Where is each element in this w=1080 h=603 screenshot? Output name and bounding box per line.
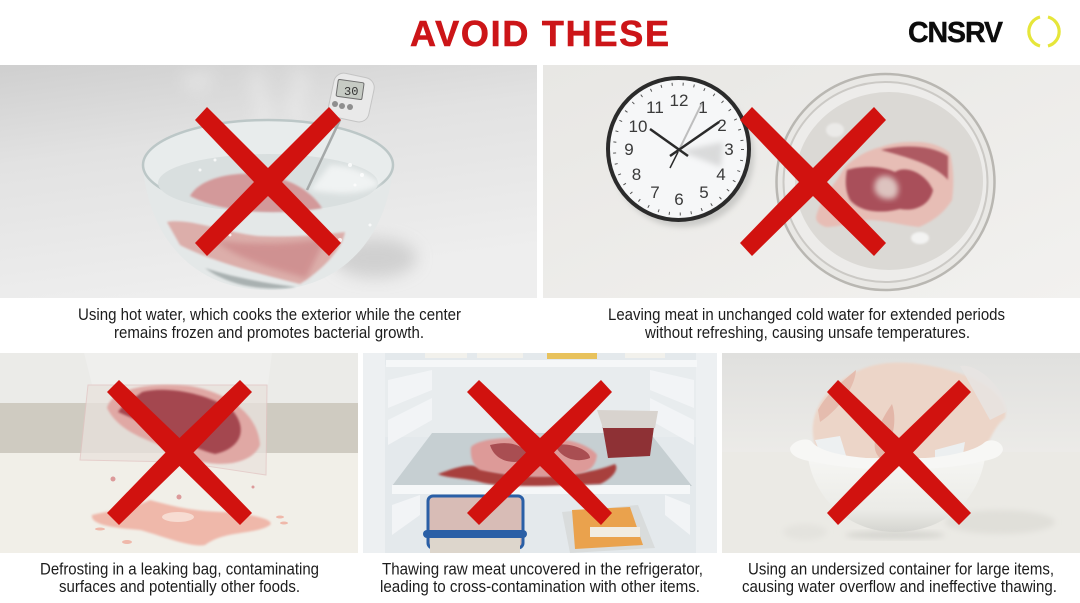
caption: hot water [78, 306, 461, 342]
red cross [740, 107, 886, 256]
clock: 3 [724, 140, 734, 159]
logo: CNSRV [908, 17, 1059, 49]
puddle and drips [92, 476, 288, 545]
bowl shadow [333, 238, 417, 278]
white bowl [790, 440, 1003, 532]
steak [107, 385, 260, 464]
lower steak [167, 221, 345, 284]
steam [189, 70, 301, 130]
clock: 1 [698, 98, 708, 117]
orange container [562, 505, 655, 553]
counter shadow and water [849, 512, 1052, 540]
bubbles [198, 158, 372, 242]
plastic bag [80, 384, 268, 476]
clock [608, 78, 754, 227]
red cross [827, 380, 971, 525]
clock: 5 [699, 183, 709, 202]
title: AVOID THESE [410, 13, 669, 54]
steak [816, 142, 953, 227]
spilled blood [438, 464, 616, 486]
clock: 12 [670, 91, 688, 110]
caption: uncovered in refrigerator [380, 560, 703, 596]
red cross [195, 107, 341, 256]
bowl with steak [776, 74, 994, 290]
glass bowl [143, 120, 393, 290]
caption: unchanged cold water: Leaving meat in unchanged cold water for extended periods [608, 306, 1005, 324]
meat container [597, 410, 658, 458]
caption: uncovered in refrigerator: Thawing raw meat uncovered in the refrigerator, [382, 560, 703, 578]
whole chicken [813, 363, 1006, 465]
raw steak [471, 438, 597, 477]
thermometer [307, 71, 376, 190]
caption: hot water: remains frozen and promotes bacterial growth. [114, 324, 424, 342]
clock: 7 [650, 183, 660, 202]
caption: uncovered in refrigerator: leading to cross-contamination with other items. [380, 578, 700, 596]
clock: 8 [632, 165, 641, 184]
caption: undersized container: causing water overflow and ineffective thawing. [742, 578, 1057, 596]
clock: 6 [674, 190, 684, 209]
red cross [107, 380, 252, 525]
upper steak [190, 174, 322, 212]
caption: hot water: Using hot water, which cooks the exterior while the center [78, 306, 461, 324]
caption: unchanged cold water: without refreshing, causing unsafe temperatures. [644, 324, 970, 342]
caption: unchanged cold water [608, 306, 1005, 342]
panel: unchanged cold water [543, 65, 1080, 298]
side rails [388, 370, 694, 535]
blue container [423, 496, 527, 553]
caption: leaking bag: Defrosting in a leaking bag, contaminating [40, 560, 319, 578]
clock: 11 [646, 98, 664, 117]
clock: 10 [629, 117, 647, 136]
clock: 4 [716, 165, 726, 184]
thermometer: 30 [344, 85, 358, 99]
panel: hot water [0, 65, 537, 298]
panel: leaking bag [0, 353, 358, 553]
red cross [467, 380, 612, 525]
glass shelf [392, 433, 692, 494]
caption: leaking bag: surfaces and potentially other foods. [59, 578, 300, 596]
panel: undersized container [722, 353, 1080, 553]
panel: uncovered in refrigerator [363, 353, 717, 553]
caption: undersized container [742, 560, 1057, 596]
clock: 2 [717, 116, 727, 135]
caption: undersized container: Using an undersized container for large items, [748, 560, 1054, 578]
top shelf items [386, 353, 697, 367]
clock: 9 [624, 140, 634, 159]
caption: leaking bag [40, 560, 319, 596]
logo: CNSRV: CNSRV [908, 17, 1003, 49]
